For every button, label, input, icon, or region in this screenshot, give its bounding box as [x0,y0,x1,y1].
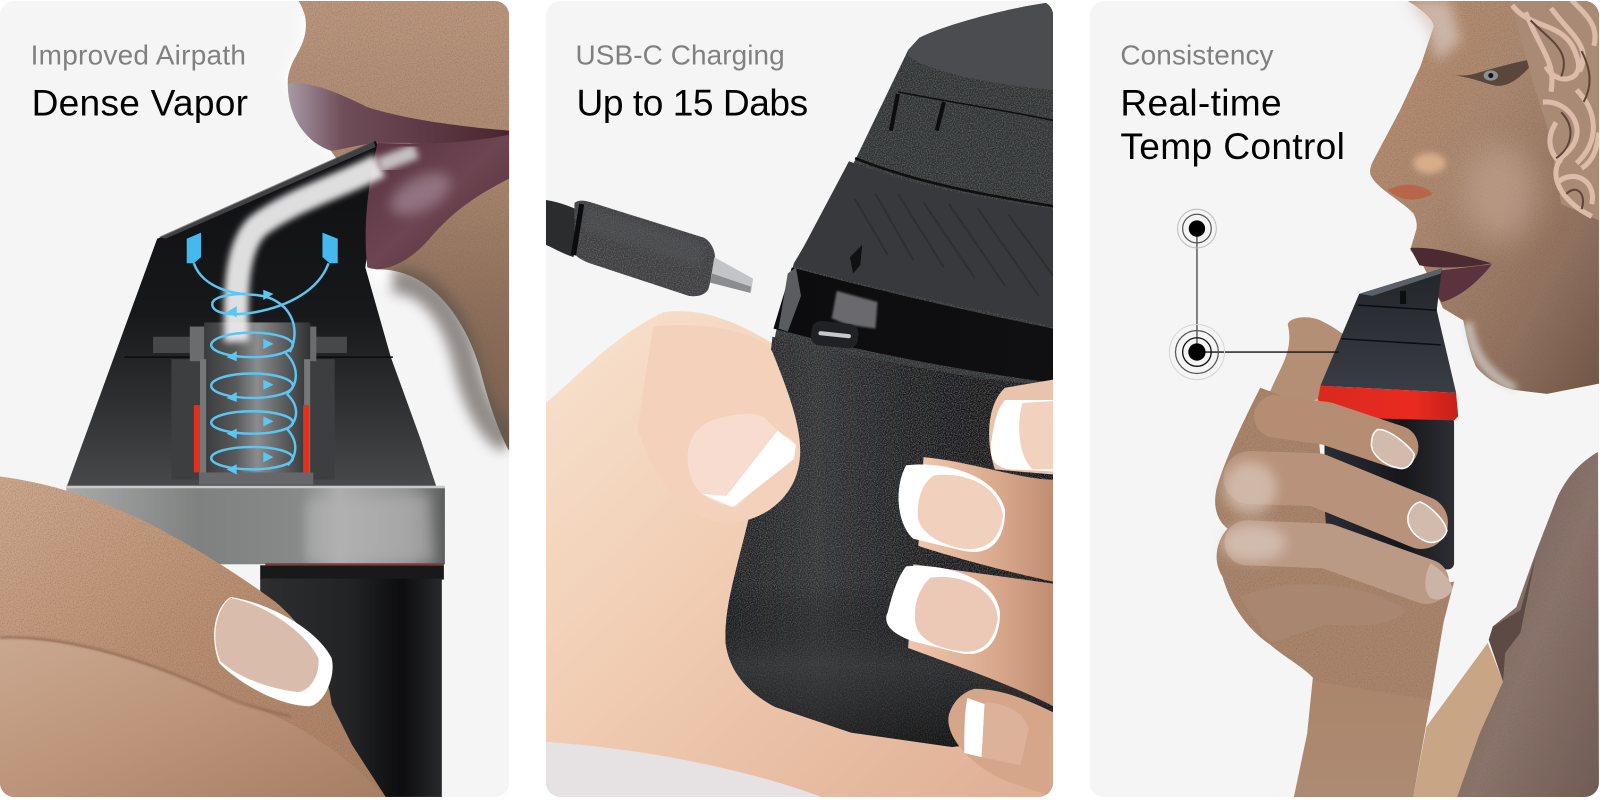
panel: improved airpath [0,0,509,797]
shirt and upper arm [1413,452,1599,797]
icon: target marker top [1178,209,1216,248]
text: usb-c charging: USB-C Charging [576,39,785,70]
wrist [1294,620,1444,797]
hand gripping device [1215,388,1454,700]
fingernails [886,400,1053,765]
hand and palm [546,311,1053,797]
device cone and cap [767,2,1053,408]
red band [1316,386,1458,420]
lower thumb [1240,585,1406,643]
panel: usb-c charging [546,1,1053,797]
heading: real-time temp control: Real-time [1120,81,1282,123]
lips [1410,248,1492,302]
knuckle highlights [1220,461,1286,561]
eye [1454,60,1529,86]
thumb tip behind device [1270,317,1342,400]
right fingers [908,380,1053,797]
finger one [1276,416,1397,447]
device mouthpiece and cone [66,141,437,488]
face: lower face and chin skin [288,0,509,454]
lower lip [366,135,509,269]
device body [725,337,1053,747]
text: consistency: Consistency [1120,39,1274,70]
finger two [1250,478,1421,522]
hair curls [1510,0,1599,220]
panel: consistency [1090,0,1599,797]
vapor plume [218,146,422,347]
text: improved airpath: Improved Airpath [31,39,246,70]
heading: real-time temp control [1120,81,1345,167]
usb-c cable [546,200,753,296]
glossy glass band and usb-c port [773,267,1053,383]
desk surface [546,740,827,797]
device cone [1320,268,1456,393]
heading: dense vapor: Dense Vapor [32,81,248,123]
connector lines [1197,229,1339,352]
icon: target marker bottom [1169,324,1224,380]
device body [260,565,444,797]
device body [1324,416,1454,569]
hand fingernails [1371,430,1452,600]
face profile [1370,0,1599,394]
upper lip [288,83,509,151]
finger three [1247,543,1427,582]
heading: up to 15 dabs: Up to 15 Dabs [577,81,808,123]
heading: real-time temp control: Temp Control [1120,125,1345,167]
thumb with french-tip nail [638,325,800,523]
cutaway core with red heating bars [153,322,347,485]
fingers holding device [0,477,386,797]
transparent tank band [66,486,445,565]
airflow: blue inlets and spiral [187,233,338,474]
fingernail [214,597,333,706]
